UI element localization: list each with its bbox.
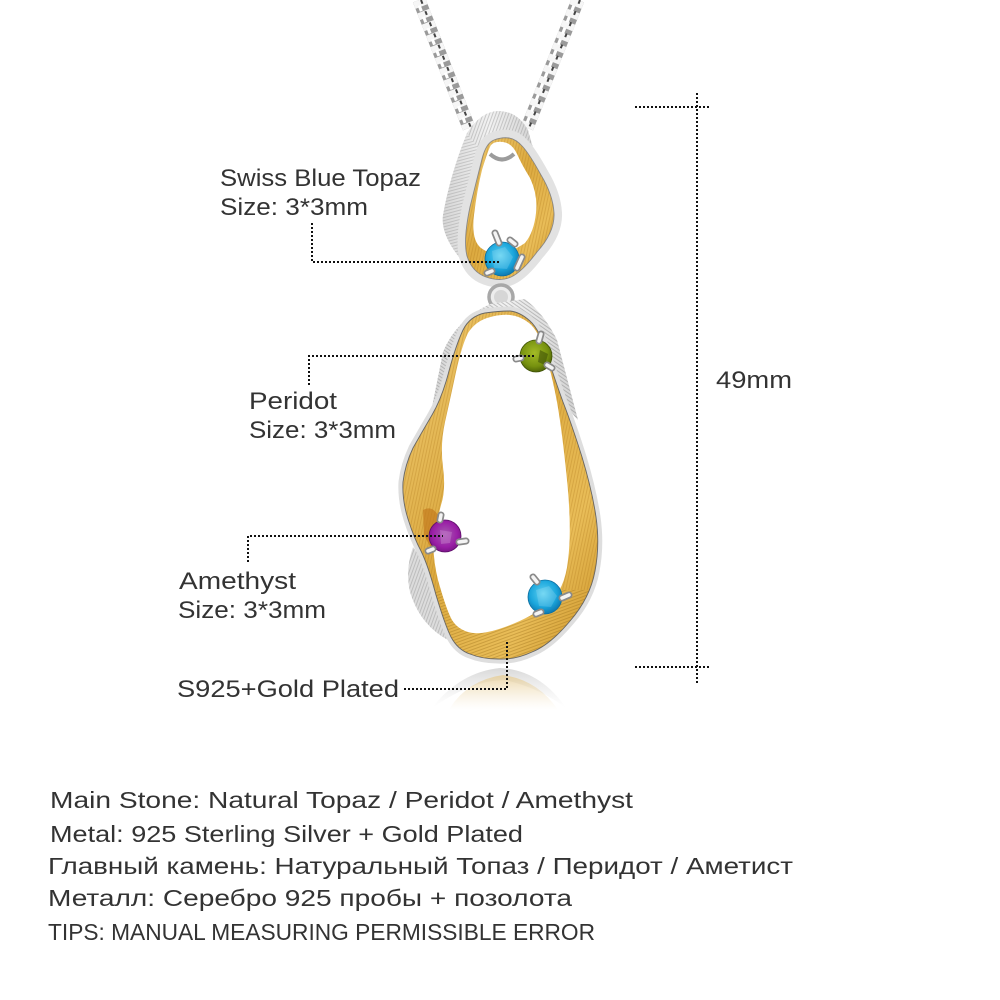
- gold inner band with silver rim: [466, 138, 554, 280]
- specification text block: Металл: Серебро 925 пробы + позолота: [48, 885, 573, 911]
- stone: Swiss blue topaz, upper: [485, 233, 522, 276]
- gold band with silver rim: [395, 300, 610, 665]
- stone: amethyst: [428, 515, 466, 552]
- specification text block: [48, 787, 793, 945]
- specification text block: Metal: 925 Sterling Silver + Gold Plated: [50, 821, 523, 847]
- callout: Swiss Blue Topaz: [220, 165, 500, 262]
- pendant reflection: [432, 668, 566, 710]
- callout: Swiss Blue Topaz: Size: 3*3mm: [220, 194, 368, 221]
- specification text block: Главный камень: Натуральный Топаз / Перидот / Аметист: [48, 853, 793, 879]
- inner loop detail: [490, 154, 514, 160]
- callout: Peridot: Size: 3*3mm: [249, 417, 396, 444]
- dimension: 49mm height: 49mm: [716, 367, 792, 394]
- dimension: 49mm height: [635, 93, 792, 685]
- opening of large pendant: [434, 315, 570, 633]
- specification text block: TIPS: MANUAL MEASURING PERMISSIBLE ERROR: [48, 919, 595, 945]
- connecting ring: [489, 285, 513, 309]
- opening of small pendant: [473, 142, 536, 253]
- callout: Amethyst: Amethyst: [179, 568, 296, 595]
- callout: Swiss Blue Topaz: Swiss Blue Topaz: [220, 165, 421, 192]
- textured silver top edge: [431, 299, 578, 420]
- textured silver leaf: [408, 547, 448, 640]
- box chain: [417, 0, 580, 128]
- textured silver bail: [443, 111, 535, 262]
- callout: Peridot: Peridot: [249, 388, 337, 415]
- callout: S925 gold plated: S925+Gold Plated: [177, 676, 399, 703]
- stone: blue topaz, lower: [528, 577, 569, 614]
- infographic canvas: [48, 0, 792, 940]
- small upper pendant: [443, 111, 554, 279]
- stone: peridot: [516, 334, 552, 372]
- callout: Amethyst: Size: 3*3mm: [178, 597, 326, 624]
- large lower pendant: [395, 285, 610, 665]
- warm shadow near amethyst: [423, 508, 438, 550]
- callout: S925 gold plated: [177, 640, 507, 703]
- callout: Peridot: [249, 356, 535, 444]
- specification text block: Main Stone: Natural Topaz / Peridot / Amethyst: [50, 787, 634, 813]
- callout: Amethyst: [178, 536, 443, 624]
